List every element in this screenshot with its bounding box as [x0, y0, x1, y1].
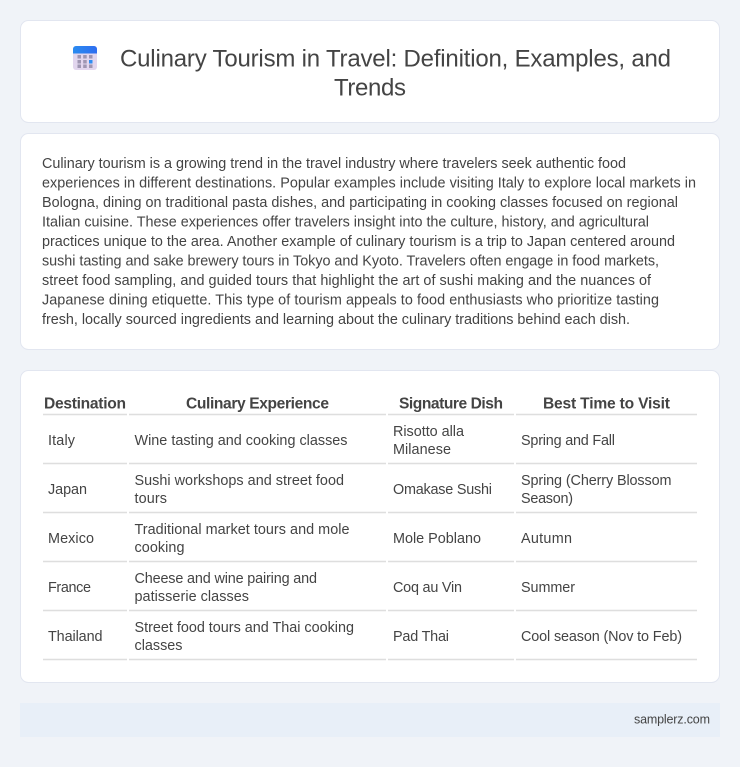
table row: Thailand: Cool season (Nov to Feb): [521, 629, 682, 645]
table row: Mexico: Mole Poblano: [393, 531, 481, 547]
table row: Italy: Italy: [48, 433, 76, 449]
table row: Mexico: Autumn: [521, 531, 572, 547]
title: [120, 46, 671, 102]
table row: Italy: Milanese: [393, 442, 451, 458]
table row: Japan: tours: [134, 491, 167, 507]
table row: Thailand: classes: [134, 638, 182, 654]
table row: Mexico: Mexico: [48, 531, 94, 547]
table row: Japan: Omakase Sushi: [393, 482, 492, 498]
table row: Japan: Japan: [48, 482, 87, 498]
text block: culinary tourism description: Japanese dining etiquette. This type of tourism appeals to food enthusiasts who prioritize tasting: [42, 292, 659, 308]
table row: Thailand: Thailand: [48, 629, 102, 645]
table header row: [43, 396, 697, 414]
footer: [20, 703, 720, 737]
panel: title header: [20, 20, 720, 122]
table header row: Destination: [44, 396, 126, 412]
table row: Italy: Wine tasting and cooking classes: [134, 433, 348, 449]
table row: Italy: Spring and Fall: [521, 433, 615, 449]
text block: culinary tourism description: practices unique to the area. Another example of culinary tourism is a trip to Japan centered around: [42, 234, 675, 250]
table header row: Culinary Experience: [186, 396, 329, 412]
table row: Italy: [43, 424, 697, 464]
table row: Italy: Risotto alla: [393, 424, 464, 440]
table row: France: Summer: [521, 580, 575, 596]
text block: culinary tourism description: fresh, locally sourced ingredients and learning about the culinary traditions behind each dish.: [42, 312, 630, 328]
table row: France: France: [48, 580, 91, 596]
text block: culinary tourism description: Bologna, dining on traditional pasta dishes, and participating in cooking classes focused on regional: [42, 195, 678, 211]
text block: culinary tourism description: Italian cuisine. These experiences offer travelers insight into the culture, history, and agricultural: [42, 214, 649, 230]
table row: France: Cheese and wine pairing and: [134, 571, 317, 587]
title: Trends: [334, 74, 406, 102]
table row: Japan: Season): [521, 491, 573, 507]
panel: destinations table: [20, 370, 720, 682]
icon: calendar: [73, 46, 97, 70]
table header row: Signature Dish: [399, 396, 503, 412]
footer: samplerz.com: [634, 712, 710, 726]
table row: Mexico: cooking: [134, 540, 184, 556]
text block: culinary tourism description: sushi tasting and sake brewery tours in Tokyo and Kyoto. Travelers often engage in food markets,: [42, 254, 659, 270]
table row: Japan: Spring (Cherry Blossom: [521, 473, 672, 489]
table row: France: Coq au Vin: [393, 580, 462, 596]
table row: Thailand: Pad Thai: [393, 629, 449, 645]
table row: Mexico: Traditional market tours and mole: [134, 522, 350, 538]
text block: culinary tourism description: [42, 156, 696, 328]
text block: culinary tourism description: Culinary tourism is a growing trend in the travel industry where travelers seek authentic food: [42, 156, 626, 172]
text block: culinary tourism description: street food sampling, and guided tours that highlight the art of sushi making and the nuances of: [42, 273, 652, 289]
table row: Mexico: [43, 522, 697, 562]
table row: Japan: [43, 473, 697, 512]
table row: France: patisserie classes: [134, 589, 249, 605]
table row: Thailand: [43, 620, 697, 660]
table header row: Best Time to Visit: [543, 396, 670, 412]
text block: culinary tourism description: experiences in different destinations. Popular examples include visiting Italy to explore local markets in: [42, 176, 696, 192]
table row: France: [43, 571, 697, 610]
panel: description: [20, 134, 720, 350]
table row: Japan: Sushi workshops and street food: [134, 473, 344, 489]
table row: Thailand: Street food tours and Thai cooking: [134, 620, 354, 636]
title: Culinary Tourism in Travel: Definition, Examples, and: [120, 46, 671, 72]
